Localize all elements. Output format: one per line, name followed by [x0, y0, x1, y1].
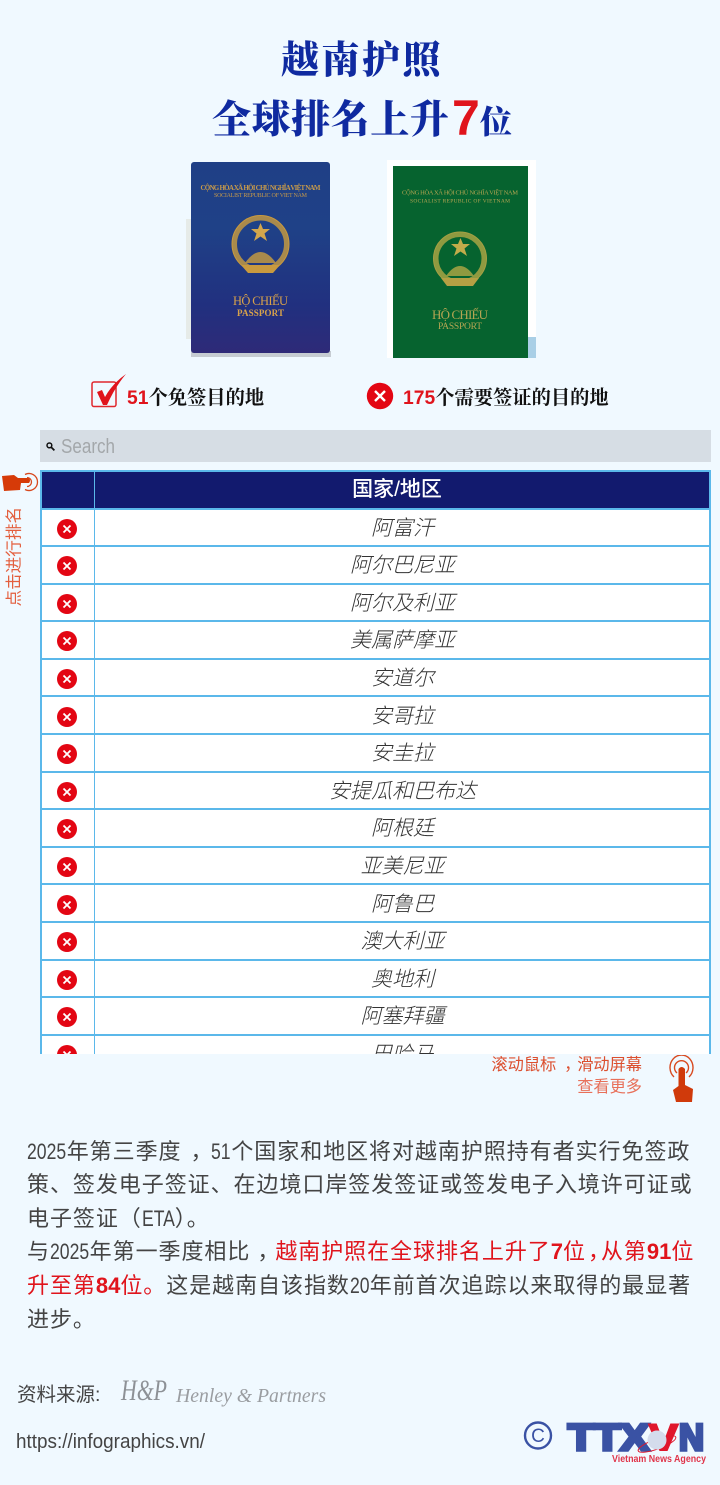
country table [40, 470, 711, 1054]
row: 安哥拉 [40, 698, 711, 735]
paragraph 2 line 3: 进步。 [27, 1307, 96, 1332]
image: green passport [387, 160, 536, 358]
row: 安道尔 [40, 660, 711, 697]
title suffix: 位 [480, 104, 512, 140]
logo: TTXVN copyright: C [531, 1426, 545, 1447]
legend: visa free [91, 374, 264, 409]
logo: TTXVN copyright: N [679, 1417, 704, 1458]
hint: scroll for more: ， [564, 1056, 580, 1074]
column divider [94, 470, 95, 1054]
body text [27, 1139, 694, 1332]
logo: TTXVN copyright: TTX [568, 1417, 649, 1458]
title number 7: 7 [452, 90, 480, 146]
table frame lines [40, 470, 711, 1054]
row: 美属萨摩亚 [40, 622, 711, 660]
row: 阿富汗 [40, 510, 711, 547]
logo: TTXVN copyright [524, 1417, 706, 1465]
row: 澳大利亚 [40, 923, 711, 961]
row: 阿尔及利亚 [40, 585, 711, 622]
paragraph 2: ， [257, 1239, 279, 1264]
hint: scroll for more [492, 1056, 642, 1096]
image: blue passport [186, 162, 331, 357]
legend text: 51个免签目的地 [127, 388, 264, 409]
row: 阿富汗: 阿富汗 [371, 516, 434, 540]
row: 阿鲁巴 [40, 886, 711, 923]
title line 2: 全球排名上升 [212, 99, 450, 142]
paragraph 2 line 2: 20 [350, 1273, 369, 1298]
image: blue passport: CỘNG HÒA XÃ HỘI CHỦ NGHĨA VIỆT NAM [200, 184, 321, 192]
row: 澳大利亚: 澳大利亚 [360, 930, 444, 953]
row: 阿尔巴尼亚: 阿尔巴尼亚 [350, 554, 455, 577]
icon: pointing hand [2, 472, 38, 492]
row: 安哥拉: 安哥拉 [371, 704, 434, 728]
row: 阿尔及利亚: 阿尔及利亚 [350, 592, 455, 615]
image: blue passport: PASSPORT [237, 308, 284, 318]
row: 奥地利: 奥地利 [371, 968, 434, 991]
row: 安提瓜和巴布达: 安提瓜和巴布达 [329, 780, 476, 803]
icon: magnifier [46, 442, 55, 451]
row: 安道尔: 安道尔 [371, 667, 434, 690]
title line 1: 越南护照 [281, 40, 443, 82]
hint: click to sort: 点击进行排名 [4, 507, 23, 606]
logo: Henley & Partners [120, 1376, 326, 1407]
hint: scroll for more: 查看更多 [577, 1078, 642, 1096]
row: 安圭拉: 安圭拉 [371, 742, 434, 765]
image: green passport: SOCIALIST REPUBLIC OF VIETNAM [410, 198, 510, 204]
row: 亚美尼亚 [40, 848, 711, 885]
hint: scroll for more: 滚动鼠标 滑动屏幕 [492, 1056, 642, 1074]
icon: tapping hand [669, 1055, 694, 1102]
row: 安圭拉 [40, 735, 711, 773]
row: 巴哈马 [57, 1043, 434, 1054]
row: 阿鲁巴: 阿鲁巴 [371, 892, 434, 916]
row: 亚美尼亚: 亚美尼亚 [360, 855, 444, 878]
source label: 资料来源: [17, 1384, 100, 1406]
row: 阿尔巴尼亚 [40, 547, 711, 585]
paragraph 1: 年第三季度 个国家和地区将对越南护照持有者实行免签政 [67, 1139, 690, 1164]
paragraph 1 line 3: 电子签证（ ）。 [27, 1206, 210, 1231]
icon: red cross [366, 382, 394, 410]
table header [40, 470, 711, 510]
row: 奥地利 [40, 961, 711, 998]
image: green passport: CỘNG HÒA XÃ HỘI CHỦ NGHĨA VIỆT NAM [402, 188, 518, 196]
image: blue passport: HỘ CHIẾU [233, 293, 288, 308]
image: green passport: PASSPORT [438, 322, 482, 332]
image: blue passport: SOCIALIST REPUBLIC OF VIET NAM [214, 193, 308, 199]
search box [40, 430, 711, 462]
row: 阿根廷 [40, 810, 711, 848]
paragraph 1: 2025 [27, 1139, 66, 1164]
row: 阿塞拜疆 [40, 998, 711, 1036]
row: 安提瓜和巴布达 [40, 773, 711, 810]
paragraph 1: ， [190, 1139, 212, 1164]
paragraph 2 line 2: 升至第84位。这是越南自该指数 年前首次追踪以来取得的最显著 [27, 1273, 691, 1298]
paragraph 2: 与 年第一季度相比 越南护照在全球排名上升了7位 从第91位 [27, 1239, 694, 1264]
paragraph 1 line 2: 策、签发电子签证、在边境口岸签发签证或签发电子入境许可证或 [27, 1172, 693, 1197]
paragraph 1: 51 [211, 1139, 231, 1164]
row: 阿塞拜疆: 阿塞拜疆 [360, 1005, 444, 1028]
paragraph 2: ， [588, 1239, 610, 1264]
header divider [94, 472, 95, 508]
icon: checkbox [91, 374, 126, 408]
title [212, 40, 512, 146]
logo: TTXVN copyright: Vietnam News Agency [612, 1454, 706, 1465]
paragraph 1 line 3: ETA [142, 1206, 175, 1231]
row: 美属萨摩亚: 美属萨摩亚 [350, 629, 455, 652]
legend: visa required [366, 382, 609, 410]
legend text: 175个需要签证的目的地 [403, 388, 609, 409]
paragraph 2: 2025 [50, 1239, 89, 1264]
image: green passport: HỘ CHIẾU [432, 307, 489, 322]
logo: Henley & Partners: Henley & Partners [175, 1385, 326, 1407]
header label: 国家/地区 [352, 478, 442, 501]
logo: TTXVN copyright: V [649, 1417, 678, 1458]
row: 阿根廷: 阿根廷 [371, 817, 434, 840]
